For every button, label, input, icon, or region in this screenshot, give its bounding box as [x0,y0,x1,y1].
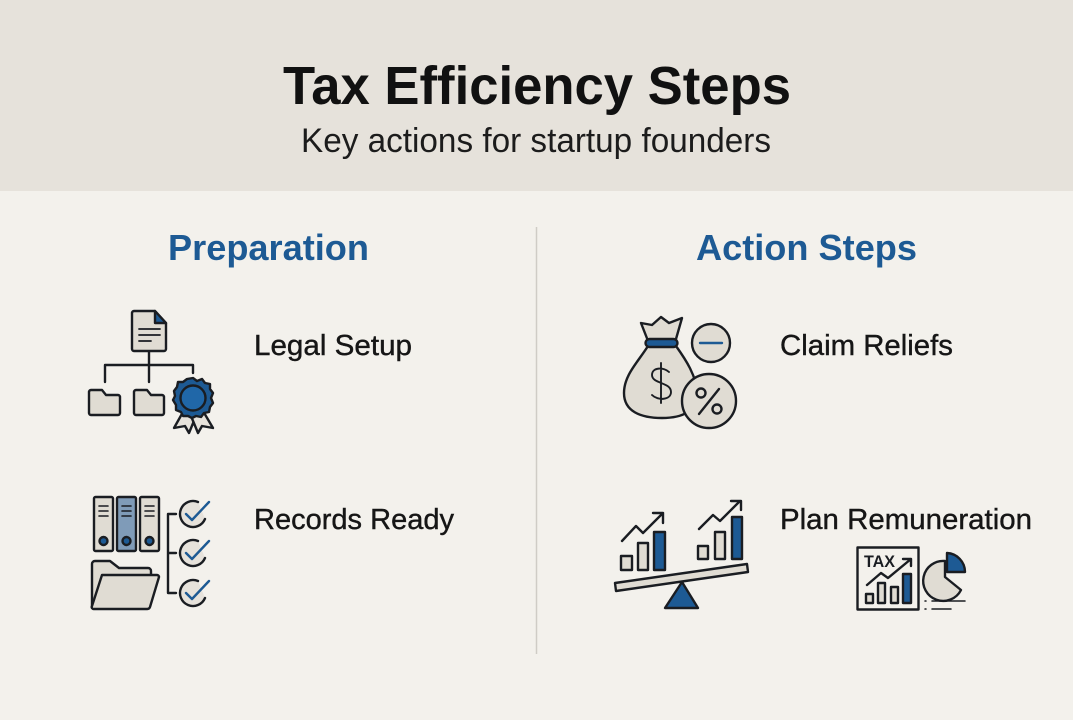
icon: money bag with minus and percent [624,317,736,428]
label: Legal Setup: Legal Setup [254,330,412,362]
label: Plan Remuneration: Plan Remuneration [780,504,1032,536]
title: Tax Efficiency Steps [283,56,791,116]
icon: balance scale with growth charts [615,501,748,608]
subtitle: Key actions for startup founders [301,122,771,160]
icon: tax report with pie chart [858,548,965,610]
icon: tax report with pie chart: TAX [864,552,896,571]
icon: binders, folder and checklist [92,497,209,609]
icon: legal structure with document, folders and badge [89,311,213,433]
header band [0,0,1073,191]
label: Claim Reliefs: Claim Reliefs [780,330,953,362]
heading: Action Steps: Action Steps [696,227,917,268]
label: Records Ready: Records Ready [254,504,454,536]
column divider [536,227,538,654]
heading: Preparation: Preparation [168,227,369,268]
